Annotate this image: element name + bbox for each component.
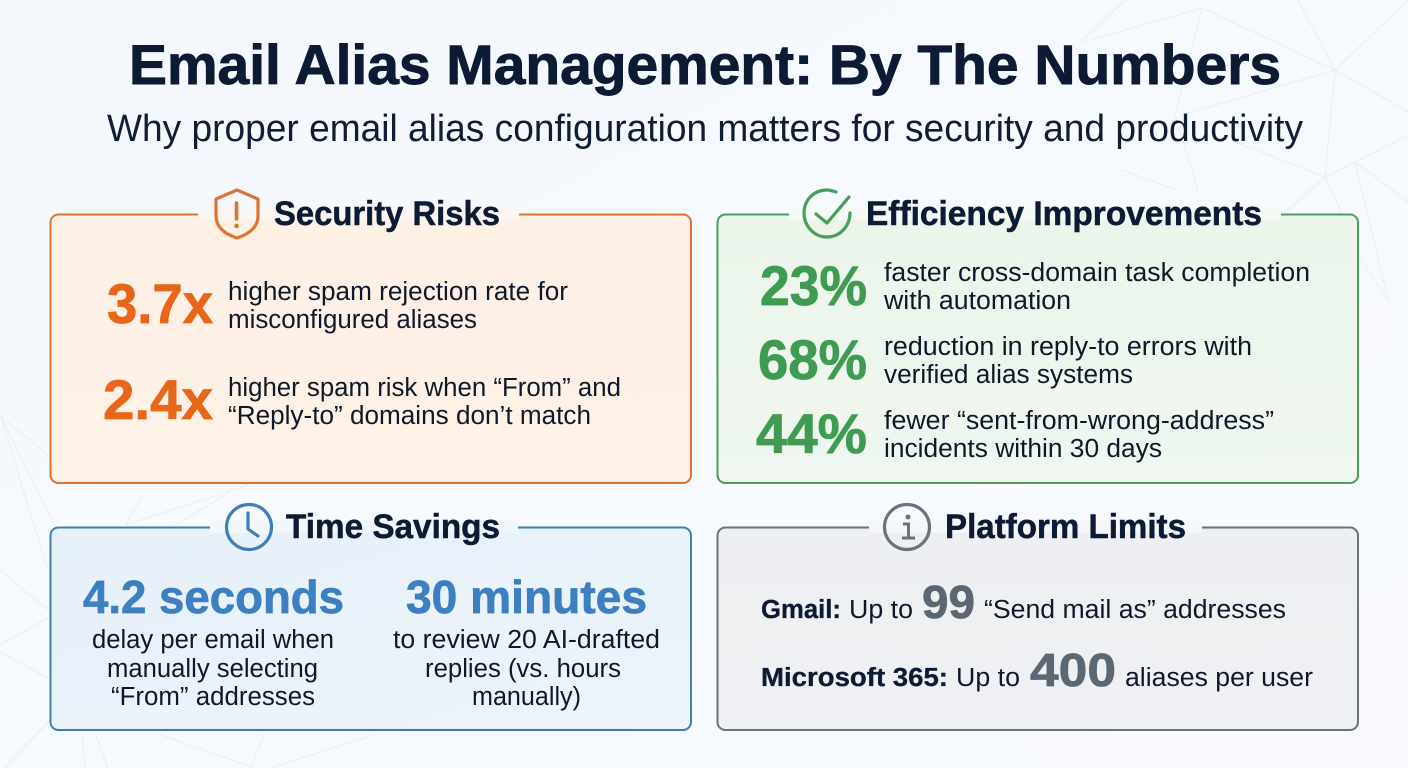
stat: 23%: 23% [760,254,867,317]
stat: 4.2 seconds [83,571,344,711]
stat: 30 minutes: to review 20 AI-drafted [393,626,660,654]
stat: 68%: verified alias systems [884,361,1133,389]
stat: 2.4x: 2.4x [103,368,213,431]
panel: platform limits [718,504,1358,730]
stat: 3.7x: higher spam rejection rate for [228,278,569,306]
stat: 44% [756,402,1274,465]
heading: security risks: Security Risks [274,195,500,233]
stat: 23% [760,254,1310,317]
row: gmail limit: Up to [849,596,913,624]
title: Email Alias Management: By The Numbers [129,33,1281,96]
row: gmail limit [761,576,1286,628]
stat: 3.7x: 3.7x [107,272,213,335]
stat: 30 minutes: manually) [472,683,581,711]
icon: shield warning [216,190,258,238]
stat: 2.4x: “Reply-to” domains don’t match [228,402,591,430]
stat: 68%: reduction in reply-to errors with [884,333,1252,361]
row: microsoft 365 limit: Up to [956,664,1020,692]
stat: 44%: fewer “sent-from-wrong-address” [884,407,1274,435]
stat: 4.2 seconds: manually selecting [107,655,318,683]
stat: 4.2 seconds: 4.2 seconds [83,571,344,623]
subtitle: Why proper email alias configuration matters for security and productivity [107,108,1303,150]
stat: 4.2 seconds: delay per email when [92,626,334,654]
stat: 23%: faster cross-domain task completion [884,259,1310,287]
panel: security risks [50,190,691,483]
stat: 68% [758,328,1252,391]
stat: 3.7x: misconfigured aliases [228,306,477,334]
stat: 30 minutes: replies (vs. hours [425,655,621,683]
row: microsoft 365 limit [761,644,1314,696]
row: microsoft 365 limit: Microsoft 365: [761,664,948,692]
stat: 4.2 seconds: “From” addresses [111,683,315,711]
stat: 68%: 68% [758,328,867,391]
stat: 44%: incidents within 30 days [884,435,1162,463]
icon: info [884,504,930,550]
panel: efficiency improvements [718,190,1358,483]
row: gmail limit: 99 [922,576,975,628]
stat: 23%: with automation [883,287,1071,315]
stat: 44%: 44% [756,402,867,465]
panel: time savings [50,504,691,730]
icon: check circle [804,190,850,237]
heading: time savings: Time Savings [286,508,500,546]
stat: 2.4x [103,368,621,431]
row: gmail limit: “Send mail as” addresses [984,596,1286,624]
row: microsoft 365 limit: aliases per user [1125,664,1314,692]
stat: 3.7x [107,272,569,335]
row: microsoft 365 limit: 400 [1030,644,1116,696]
heading: platform limits: Platform Limits [945,508,1186,546]
stat: 2.4x: higher spam risk when “From” and [228,374,621,402]
stat: 30 minutes: 30 minutes [406,571,647,623]
heading: efficiency improvements: Efficiency Improvements [866,195,1262,233]
row: gmail limit: Gmail: [761,596,841,624]
stat: 30 minutes [393,571,660,711]
icon: clock [226,504,272,550]
